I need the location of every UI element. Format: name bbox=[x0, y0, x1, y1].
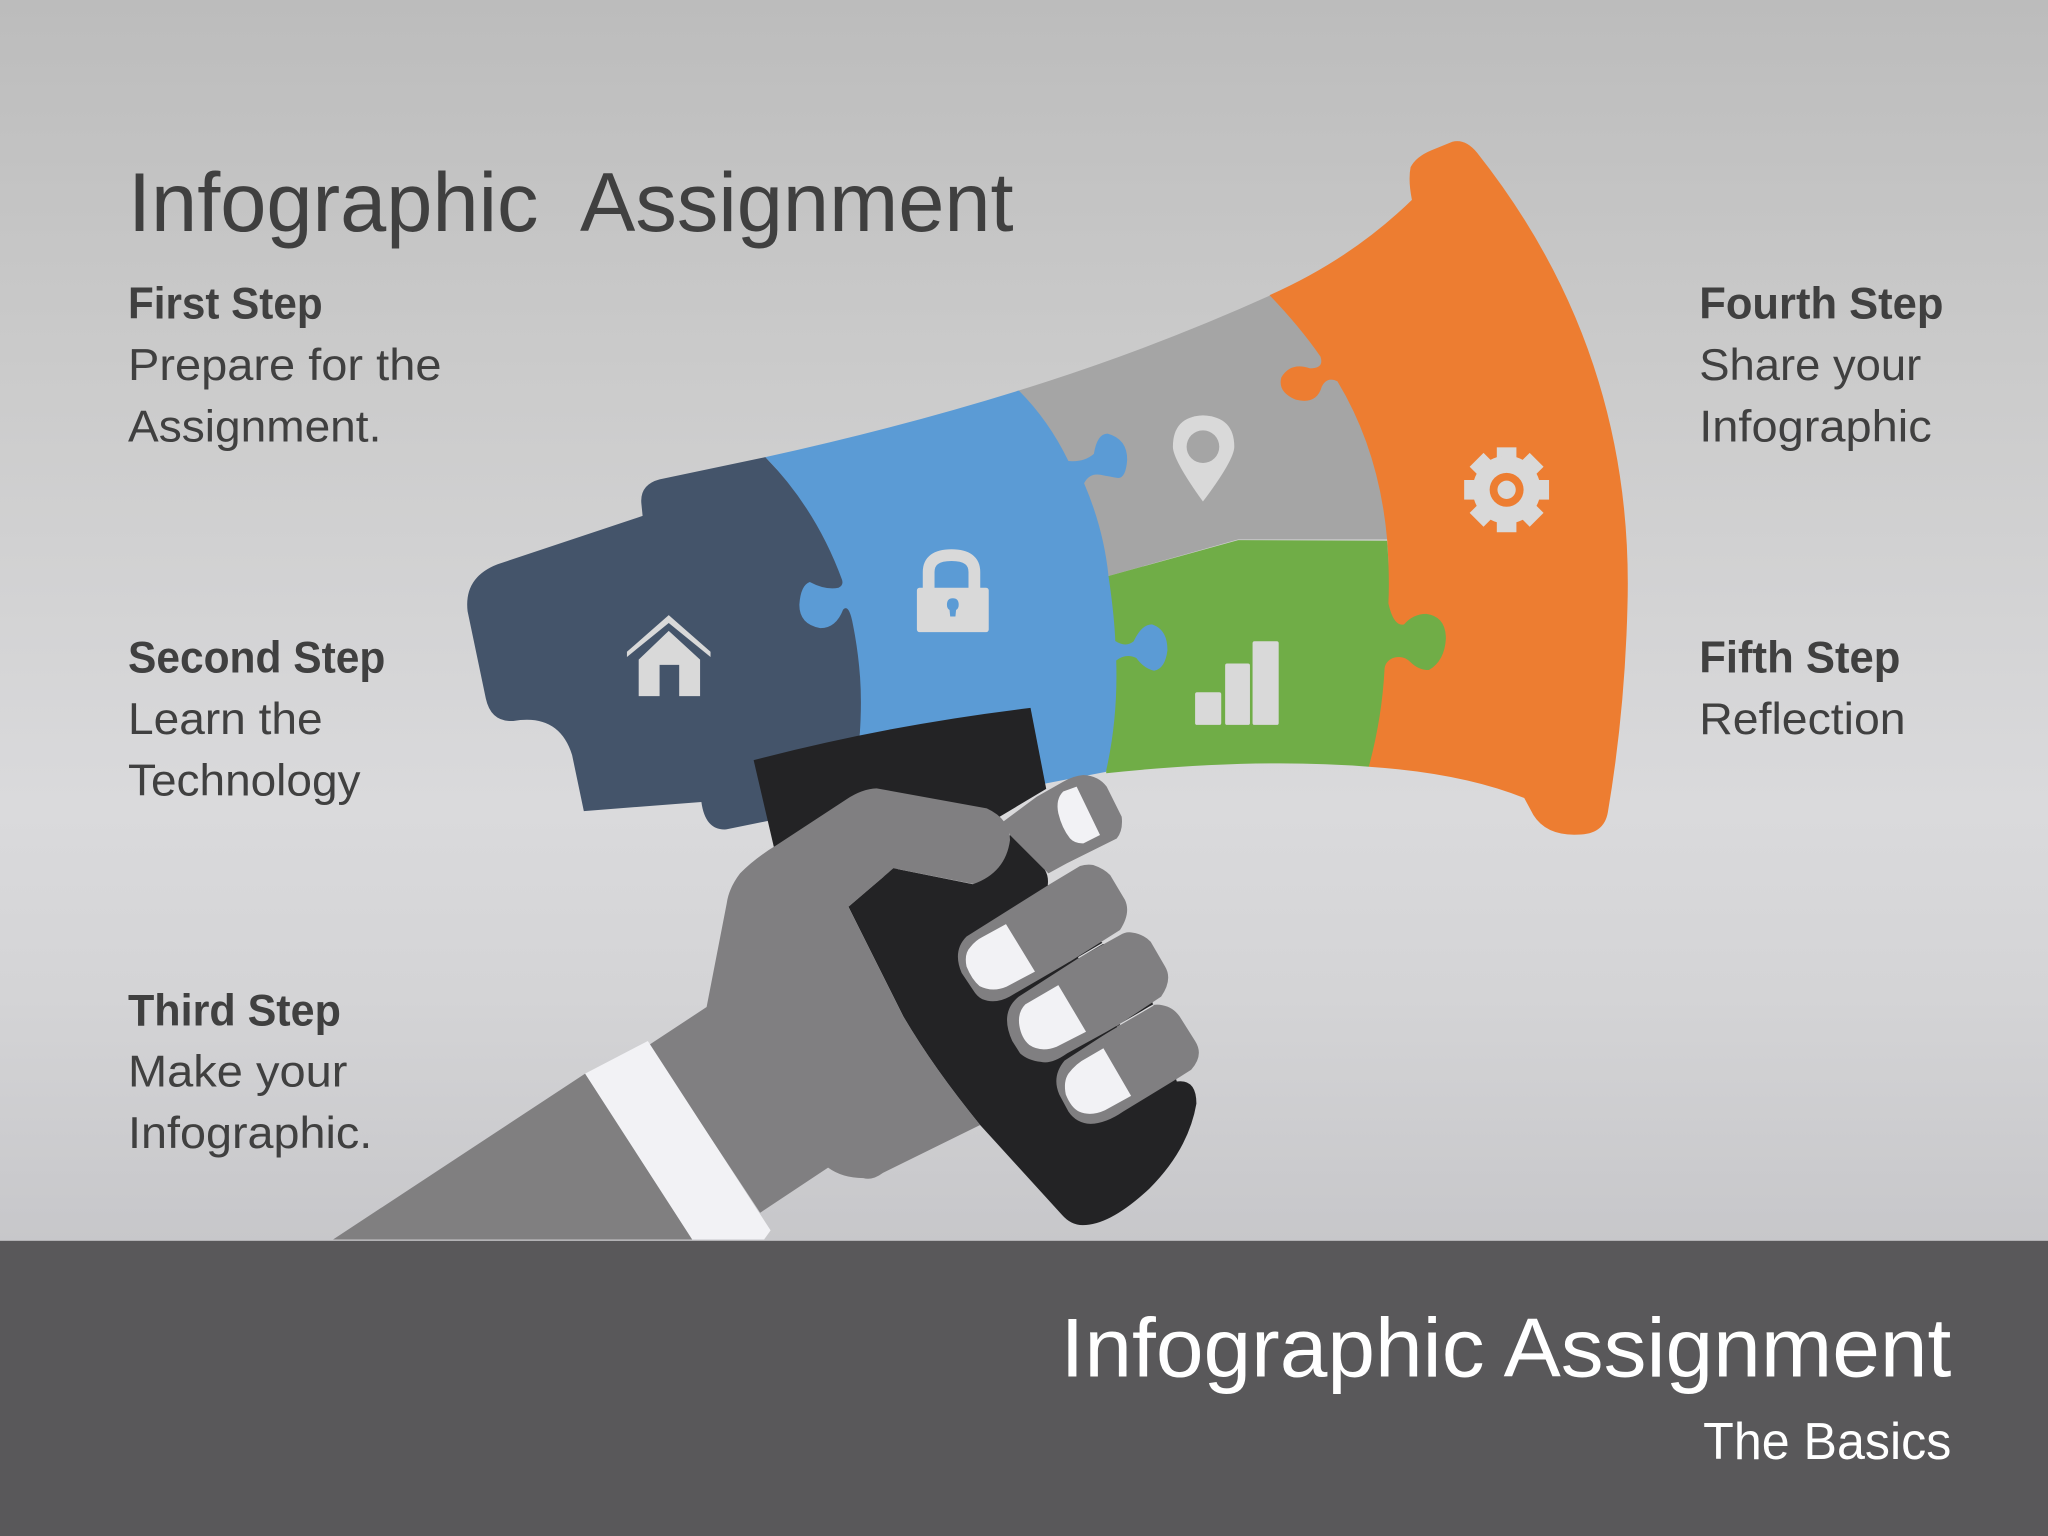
text block: second step: Second Step bbox=[128, 634, 385, 683]
hand holding megaphone bbox=[333, 775, 1199, 1240]
icon: bar chart bbox=[1195, 641, 1279, 725]
grip bbox=[848, 835, 1196, 1225]
text block: third step bbox=[128, 986, 372, 1158]
text block: fifth step bbox=[1699, 634, 1906, 744]
puzzle piece: gray bbox=[1019, 295, 1398, 576]
text block: third step: Third Step bbox=[128, 986, 341, 1035]
finger: index bbox=[1003, 775, 1122, 873]
forearm and palm bbox=[649, 788, 1010, 1213]
icon: map pin bbox=[1173, 415, 1234, 502]
icon: gear bbox=[1464, 447, 1549, 532]
text block: fourth step: Fourth Step bbox=[1699, 280, 1944, 329]
puzzle piece: orange bbox=[1270, 141, 1628, 835]
text block: third step: Make your bbox=[128, 1048, 348, 1097]
finger: ring bbox=[1007, 932, 1168, 1062]
text block: first step: Prepare for the bbox=[128, 341, 441, 390]
text block: third step: Infographic. bbox=[128, 1109, 372, 1158]
sleeve bbox=[333, 1074, 692, 1240]
icon: lock bbox=[917, 555, 989, 632]
text block: first step: First Step bbox=[128, 280, 323, 329]
fingernail: middle bbox=[966, 924, 1035, 990]
icon: house bbox=[627, 615, 711, 696]
finger: middle bbox=[958, 865, 1127, 1001]
puzzle piece: blue bbox=[765, 391, 1167, 784]
text block: first step: Assignment. bbox=[128, 402, 381, 451]
megaphone handle bbox=[754, 708, 1046, 901]
text block: fifth step: Reflection bbox=[1699, 695, 1906, 744]
puzzle piece: dark blue bbox=[467, 457, 875, 829]
text block: fourth step: Share your bbox=[1699, 341, 1922, 390]
footer subtitle: The Basics bbox=[1703, 1413, 1951, 1471]
fingernail: little bbox=[1065, 1048, 1131, 1114]
text block: fourth step: Infographic bbox=[1699, 402, 1932, 451]
puzzle piece: green bbox=[1097, 540, 1446, 773]
text block: fourth step bbox=[1699, 280, 1944, 451]
text block: second step: Technology bbox=[128, 756, 361, 805]
title: Infographic Assignment bbox=[128, 155, 1014, 249]
fingernail: ring bbox=[1019, 985, 1086, 1049]
finger: little bbox=[1056, 1005, 1199, 1124]
text block: first step bbox=[128, 280, 441, 451]
text block: second step bbox=[128, 634, 385, 805]
text block: second step: Learn the bbox=[128, 695, 323, 744]
footer title: Infographic Assignment bbox=[1061, 1301, 1951, 1395]
palm highlight bbox=[844, 908, 853, 922]
shirt cuff bbox=[585, 1041, 771, 1240]
text block: fifth step: Fifth Step bbox=[1699, 634, 1900, 683]
fingernail: index bbox=[1058, 787, 1100, 843]
footer band bbox=[0, 1241, 2048, 1536]
